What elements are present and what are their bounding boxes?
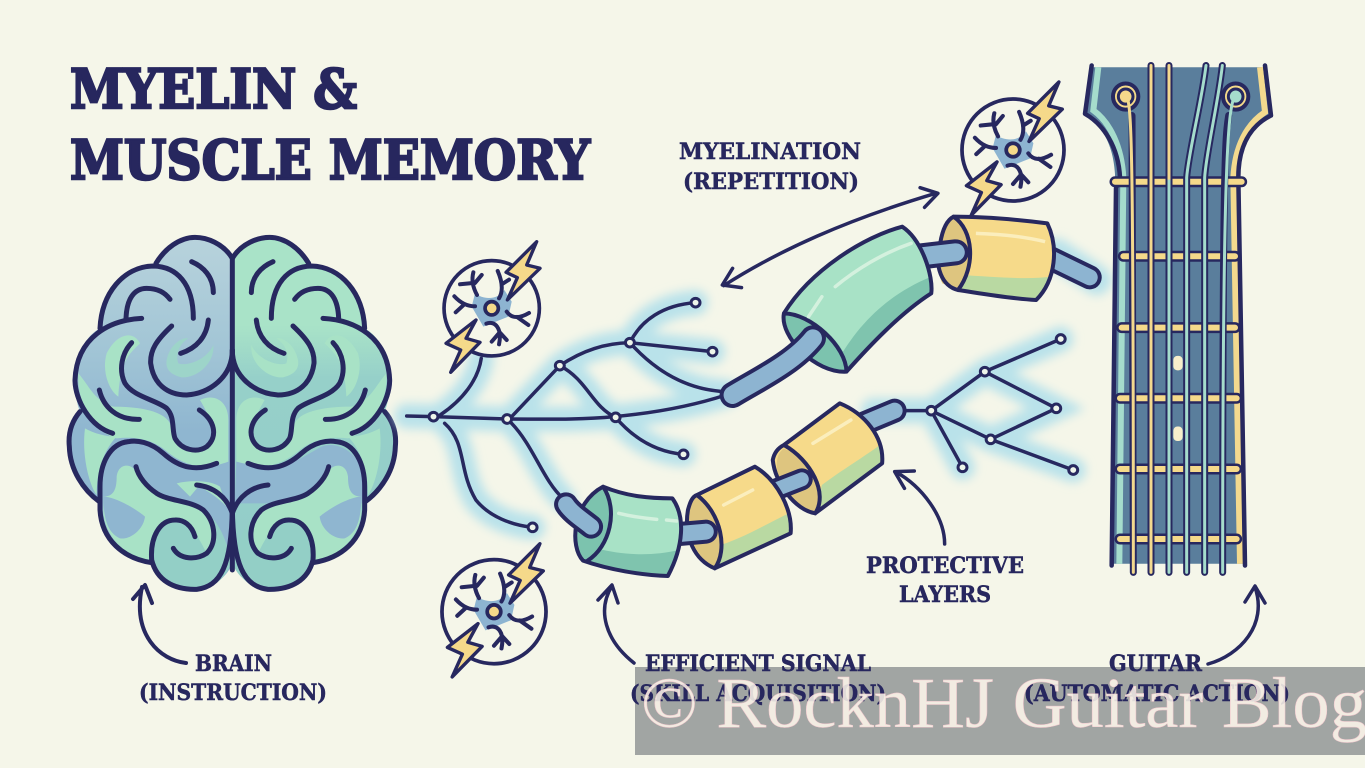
label: myelination: MYELINATION <box>679 139 861 165</box>
title <box>70 57 591 192</box>
icon: neuron bottom left <box>442 544 546 677</box>
label: efficient signal <box>630 651 886 707</box>
frets <box>1115 182 1242 539</box>
guitar neck and headstock <box>1085 66 1271 572</box>
label: guitar <box>1024 651 1290 707</box>
branch nodes <box>429 298 1078 532</box>
fret dots <box>1173 356 1183 441</box>
tube between yellow segments <box>771 479 802 492</box>
label: protective layers: LAYERS <box>899 582 991 608</box>
label: myelination <box>679 139 861 195</box>
brain illustration <box>69 237 396 589</box>
brain left hemisphere fills <box>69 237 232 589</box>
brain right hemisphere fills <box>232 237 396 589</box>
nerve branches <box>407 298 1078 532</box>
strings <box>1127 66 1234 572</box>
arrow: protective layers <box>895 471 945 544</box>
title: MUSCLE MEMORY <box>70 128 591 192</box>
tube between green and yellow <box>668 532 706 535</box>
upper myelinated axon <box>722 188 1090 395</box>
watermark band <box>635 667 1365 755</box>
signal glow around nerve branches <box>407 253 1096 527</box>
title: MYELIN & <box>70 57 357 121</box>
icon: neuron top right <box>962 82 1064 215</box>
label: brain <box>139 651 327 706</box>
yellow myelin segment two <box>773 403 882 513</box>
yellow myelin segment one <box>687 467 791 568</box>
blue axon connector <box>904 252 956 258</box>
exit axon tube <box>1047 257 1090 277</box>
icon: neuron top left <box>444 242 540 372</box>
lower myelinated axon <box>566 403 945 576</box>
exit tube <box>864 411 895 423</box>
label: brain: (INSTRUCTION) <box>139 680 327 706</box>
green myelin segment <box>784 227 932 372</box>
yellow myelin segment <box>938 217 1054 300</box>
label: guitar: (AUTOMATIC ACTION) <box>1024 681 1290 707</box>
arrow: myelination double-headed <box>722 188 938 288</box>
label: brain: BRAIN <box>195 651 272 677</box>
blue axon tube, lower <box>733 338 813 395</box>
label: protective layers: PROTECTIVE <box>866 553 1024 579</box>
label: protective layers <box>866 553 1024 608</box>
neck body <box>1085 67 1270 564</box>
label: efficient signal: (SKILL ACQUISITION) <box>630 681 886 707</box>
arrow: brain <box>133 585 186 663</box>
entry tube <box>566 504 591 527</box>
tuning pegs <box>1113 83 1248 110</box>
label: efficient signal: EFFICIENT SIGNAL <box>645 651 871 677</box>
edge colour strips <box>1093 67 1123 564</box>
brain outlines <box>69 237 396 589</box>
label: myelination: (REPETITION) <box>683 169 859 195</box>
neck outline <box>1085 66 1271 566</box>
arrow: guitar <box>1208 586 1265 664</box>
watermark text: © RocknHJ Guitar Blog <box>641 663 1365 743</box>
arrow: efficient signal <box>598 585 634 663</box>
green myelin segment <box>575 487 681 576</box>
label: guitar: GUITAR <box>1109 651 1203 677</box>
